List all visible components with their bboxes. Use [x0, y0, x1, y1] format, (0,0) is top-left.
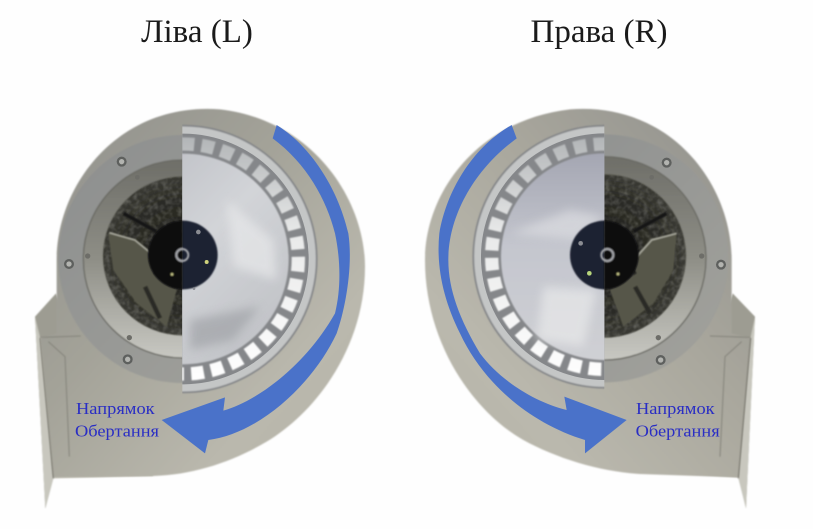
- title: right: Права (R): [530, 14, 668, 50]
- right direction label: Обертання: [636, 422, 720, 441]
- left flange: [58, 135, 306, 383]
- right direction label: [636, 399, 720, 441]
- left direction label: [75, 399, 159, 441]
- left direction label: Обертання: [75, 422, 159, 441]
- right blade windows: [484, 136, 604, 377]
- right mounting plate: [623, 293, 755, 508]
- left rotation arrow: [162, 125, 350, 453]
- right flange: [480, 134, 728, 382]
- right direction label: Напрямок: [636, 399, 716, 418]
- right open half: motor interior: [604, 174, 687, 339]
- motor vanes: [108, 213, 177, 327]
- right fan: [425, 109, 755, 508]
- left open half: motor interior: [102, 176, 182, 336]
- motor vanes: [610, 213, 677, 327]
- left direction label: Напрямок: [76, 399, 156, 418]
- left housing: [41, 109, 365, 477]
- right hub: [601, 221, 639, 289]
- right plate folds: [710, 336, 751, 478]
- title: left: Ліва (L): [141, 14, 253, 50]
- right wheel half: [472, 124, 604, 389]
- right housing: [425, 109, 751, 477]
- left wheel half: [182, 124, 318, 394]
- left flange bolts: [64, 157, 140, 364]
- left blade windows: [182, 136, 306, 382]
- right rotation arrow: [439, 125, 627, 453]
- left plate folds: [40, 336, 81, 478]
- left fan: [35, 109, 365, 508]
- left mounting plate: [35, 293, 153, 508]
- right flange bolts: [649, 158, 726, 365]
- left hub: [148, 221, 188, 289]
